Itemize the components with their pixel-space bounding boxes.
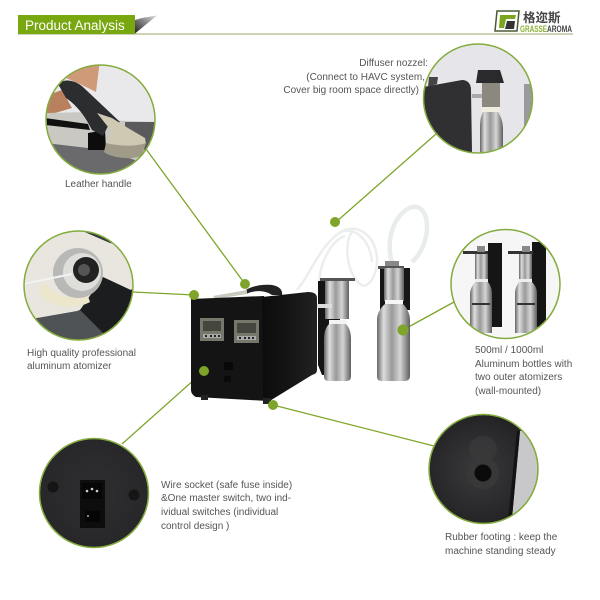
- text: rubber footing: [445, 532, 558, 557]
- circle: aluminum atomizer: [23, 230, 135, 342]
- text: rubber footing: machine standing steady: [445, 546, 556, 557]
- logo: Grasse Aroma: 格迩斯: [523, 10, 561, 25]
- tube coil right bottle: [390, 207, 427, 268]
- logo: Grasse Aroma: GRASSE: [520, 24, 547, 35]
- circle: leather handle: [45, 60, 160, 176]
- display panel 1: [200, 318, 224, 341]
- circle: wire socket: [38, 437, 150, 549]
- machine: [191, 285, 317, 404]
- dots: [189, 217, 408, 410]
- text: rubber footing: Rubber footing : keep the: [445, 532, 558, 543]
- text: wire socket: Wire socket (safe fuse inside): [161, 480, 292, 491]
- socket: [224, 362, 233, 370]
- rubber foot: [201, 395, 208, 400]
- circle: aluminum bottles: [450, 229, 562, 341]
- text: diffuser nozzle: (Connect to HAVC system,: [306, 72, 425, 83]
- left bottle with wall mount: [317, 278, 355, 381]
- text: wire socket: &One master switch, two ind-: [161, 493, 291, 504]
- text: aluminum bottles: 500ml / 1000ml: [475, 345, 543, 356]
- text: atomizer: High quality professional: [27, 348, 136, 359]
- connector lines: [122, 134, 454, 446]
- tube coil left bottle: [297, 229, 377, 290]
- right bottle with wall mount: [377, 261, 410, 381]
- circle: rubber footing: [428, 414, 540, 526]
- text: atomizer: [27, 348, 136, 372]
- text: aluminum bottles: [475, 345, 572, 397]
- header: product analysis banner: Product Analysis: [25, 18, 125, 33]
- circle: diffuser nozzle: [418, 44, 535, 160]
- text: wire socket: [161, 480, 292, 532]
- header: product analysis banner: [18, 15, 573, 34]
- text: diffuser nozzle: Diffuser nozzel:: [359, 58, 428, 69]
- text: leather handle: Leather handle: [65, 179, 132, 190]
- text: wire socket: control design ): [161, 521, 229, 532]
- logo: Grasse Aroma: [495, 10, 572, 35]
- text: aluminum bottles: two outer atomizers: [475, 372, 562, 383]
- text: wire socket: ividual switches (individual: [161, 507, 278, 518]
- text: aluminum bottles: Aluminum bottles with: [475, 359, 572, 370]
- logo: Grasse Aroma: AROMA: [547, 24, 572, 35]
- text: aluminum bottles: (wall-mounted): [475, 386, 541, 397]
- text: diffuser nozzle: Cover big room space directly): [283, 85, 419, 96]
- text: diffuser nozzle: [283, 58, 428, 96]
- display panel 2: [234, 320, 259, 343]
- text: atomizer: aluminum atomizer: [27, 361, 112, 372]
